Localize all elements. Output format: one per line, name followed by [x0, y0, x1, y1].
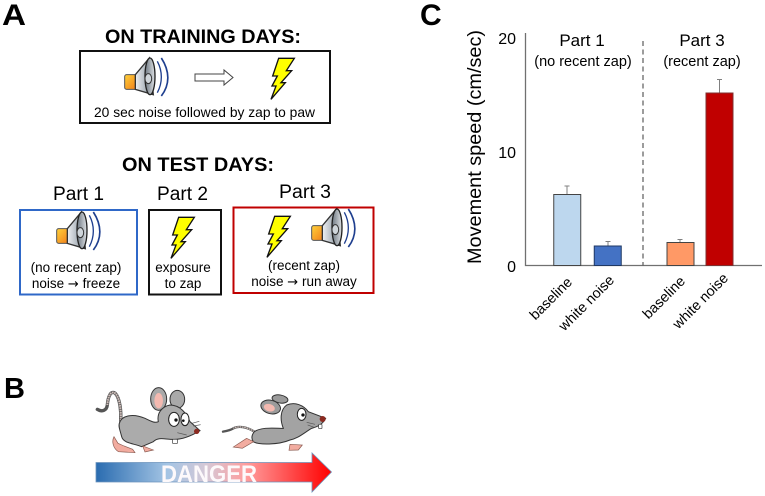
- y axis tick labels: 20: [498, 31, 516, 48]
- text: part 3 description: noise → run away: [251, 274, 357, 290]
- text: part 1 description: [31, 260, 121, 292]
- panel A: experimental protocol: [2, 0, 374, 294]
- icon: speaker: [57, 212, 100, 250]
- text: part 2 description: [155, 260, 211, 291]
- text: part 3 description: [251, 258, 357, 290]
- icon: lightning bolt: [171, 217, 194, 258]
- panel: part 3: [234, 182, 374, 293]
- x axis labels: baseline: [640, 273, 689, 322]
- y axis tick labels: 10: [498, 145, 516, 162]
- panel: part 2: [149, 184, 221, 294]
- icon: running mouse: [223, 394, 326, 450]
- text: part 3 heading: Part 3: [679, 31, 725, 50]
- panel: part 1: [20, 184, 137, 294]
- icon: frightened mouse: [97, 388, 201, 453]
- bar: part 3 baseline: [667, 240, 694, 266]
- arrow: noise then zap: [195, 70, 233, 85]
- icon: lightning bolt: [271, 58, 294, 99]
- arrow: danger gradient: [96, 453, 332, 492]
- y axis tick labels: [498, 31, 516, 276]
- x axis labels: [527, 270, 732, 335]
- heading: part 2: Part 2: [157, 184, 208, 205]
- bar: part 1 white noise: [594, 242, 621, 266]
- text: training description: 20 sec noise followed by zap to paw: [94, 104, 316, 120]
- text: danger: DANGER: [161, 461, 257, 488]
- text: part 1 heading: Part 1: [559, 31, 605, 50]
- axes: [526, 33, 762, 266]
- divider between parts: [642, 41, 644, 266]
- bar: part 3 white noise: [706, 80, 733, 266]
- y axis tick labels: 0: [507, 259, 516, 276]
- icon: speaker: [312, 209, 355, 247]
- bar: part 1 baseline: [554, 186, 581, 266]
- text: part 1 heading: [534, 31, 632, 70]
- panel letter B: B: [4, 373, 25, 405]
- text: part 3 heading: [663, 31, 741, 70]
- panel B: danger and mice: [4, 373, 332, 492]
- panel C: movement speed bar chart: [420, 0, 762, 335]
- x axis labels: white noise: [669, 270, 732, 333]
- text: part 1 description: (no recent zap): [31, 260, 121, 275]
- text: part 3 description: (recent zap): [268, 258, 340, 273]
- text: part 1 heading: (no recent zap): [534, 54, 632, 70]
- y axis title: Movement speed (cm/sec): [465, 30, 486, 264]
- text: part 1 description: noise → freeze: [32, 276, 120, 292]
- icon: speaker: [125, 58, 168, 96]
- text: part 2 description: to zap: [165, 276, 201, 291]
- heading: on test days: ON TEST DAYS:: [122, 154, 274, 176]
- text: part 3 heading: (recent zap): [663, 54, 741, 70]
- heading: part 1: Part 1: [53, 184, 104, 205]
- heading: on training days: ON TRAINING DAYS:: [105, 26, 301, 48]
- x axis labels: baseline: [527, 274, 576, 323]
- panel: training day box: [80, 51, 330, 123]
- icon: lightning bolt: [267, 216, 290, 257]
- x axis labels: white noise: [555, 272, 618, 335]
- text: part 2 description: exposure: [155, 260, 211, 275]
- heading: part 3: Part 3: [279, 182, 331, 203]
